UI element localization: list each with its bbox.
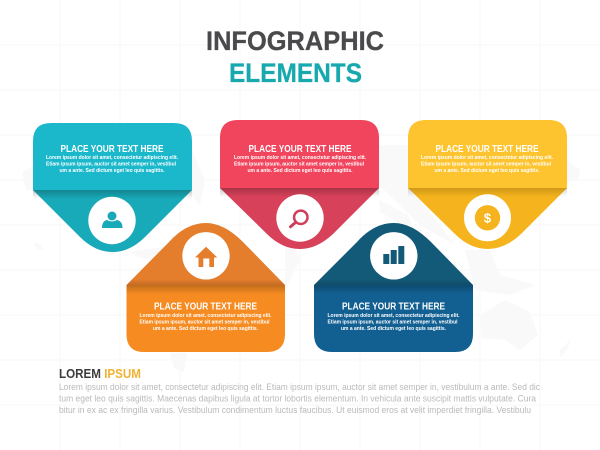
icon: dollar coin: $ <box>484 210 492 226</box>
body text: um a ante. Sed dictum eget leo quis sagittis. <box>248 168 353 174</box>
body text: Lorem ipsum dolor sit amet, consectetur adipiscing elit. <box>140 313 272 319</box>
footer paragraph: tum eget leo quis sagittis. Maecenas dapibus ligula at tortor lobortis elementum. In vehicula ante suscipit mattis vulputate. Cura <box>59 394 537 404</box>
heading: PLACE YOUR TEXT HERE <box>436 143 538 155</box>
panel: teal <box>33 123 192 252</box>
body text <box>46 155 178 174</box>
footer paragraph: bitur in ex ac ex fringilla varius. Vestibulum condimentum luctus faucibus. Ut euismod eros at velit imperdiet fringilla. Vestibulu <box>59 405 531 416</box>
body text <box>234 155 366 174</box>
heading: PLACE YOUR TEXT HERE <box>342 300 445 312</box>
footer paragraph: Lorem ipsum dolor sit amet, consectetur adipiscing elit. Etiam ipsum ipsum, auctor sit amet semper in, vestibulum a ante. Sed dic <box>59 382 540 393</box>
icon: person <box>88 197 136 244</box>
body text: Etiam ipsum ipsum, auctor sit amet semper in, vestibul <box>234 162 364 168</box>
icon: magnifier <box>276 194 324 242</box>
body text: Etiam ipsum ipsum, auctor sit amet semper in, vestibul <box>46 162 176 168</box>
body text <box>140 313 272 332</box>
body text: Lorem ipsum dolor sit amet, consectetur adipiscing elit. <box>234 155 366 161</box>
title: ELEMENTS <box>229 58 362 88</box>
icon: bar chart <box>370 232 417 280</box>
body text: um a ante. Sed dictum eget leo quis sagittis. <box>341 326 446 332</box>
body text <box>421 155 553 174</box>
panel: yellow <box>408 120 567 249</box>
icon: dollar coin <box>464 194 511 241</box>
body text: um a ante. Sed dictum eget leo quis sagittis. <box>153 326 258 332</box>
title <box>206 26 384 88</box>
body text: um a ante. Sed dictum eget leo quis sagittis. <box>434 168 540 174</box>
footer heading: LOREM IPSUM <box>59 367 141 381</box>
body text: um a ante. Sed dictum eget leo quis sagittis. <box>60 168 165 174</box>
heading: PLACE YOUR TEXT HERE <box>154 300 257 312</box>
body text <box>328 313 460 332</box>
body text: Etiam ipsum ipsum, auctor sit amet semper in, vestibul <box>421 162 551 168</box>
panel: navy <box>314 223 473 352</box>
body text: Lorem ipsum dolor sit amet, consectetur adipiscing elit. <box>46 155 178 161</box>
title: INFOGRAPHIC <box>206 26 384 56</box>
icon: house <box>182 232 230 280</box>
footer paragraph <box>59 382 540 416</box>
heading: PLACE YOUR TEXT HERE <box>60 143 164 155</box>
panel: orange <box>126 223 285 352</box>
body text: Lorem ipsum dolor sit amet, consectetur adipiscing elit. <box>328 313 460 319</box>
panel: red <box>220 120 379 249</box>
world map background <box>22 145 580 372</box>
body text: Etiam ipsum ipsum, auctor sit amet semper in, vestibul <box>328 320 458 326</box>
footer text block <box>59 367 540 416</box>
body text: Etiam ipsum ipsum, auctor sit amet semper in, vestibul <box>140 320 270 326</box>
body text: Lorem ipsum dolor sit amet, consectetur adipiscing elit. <box>421 155 553 161</box>
heading: PLACE YOUR TEXT HERE <box>248 143 352 155</box>
